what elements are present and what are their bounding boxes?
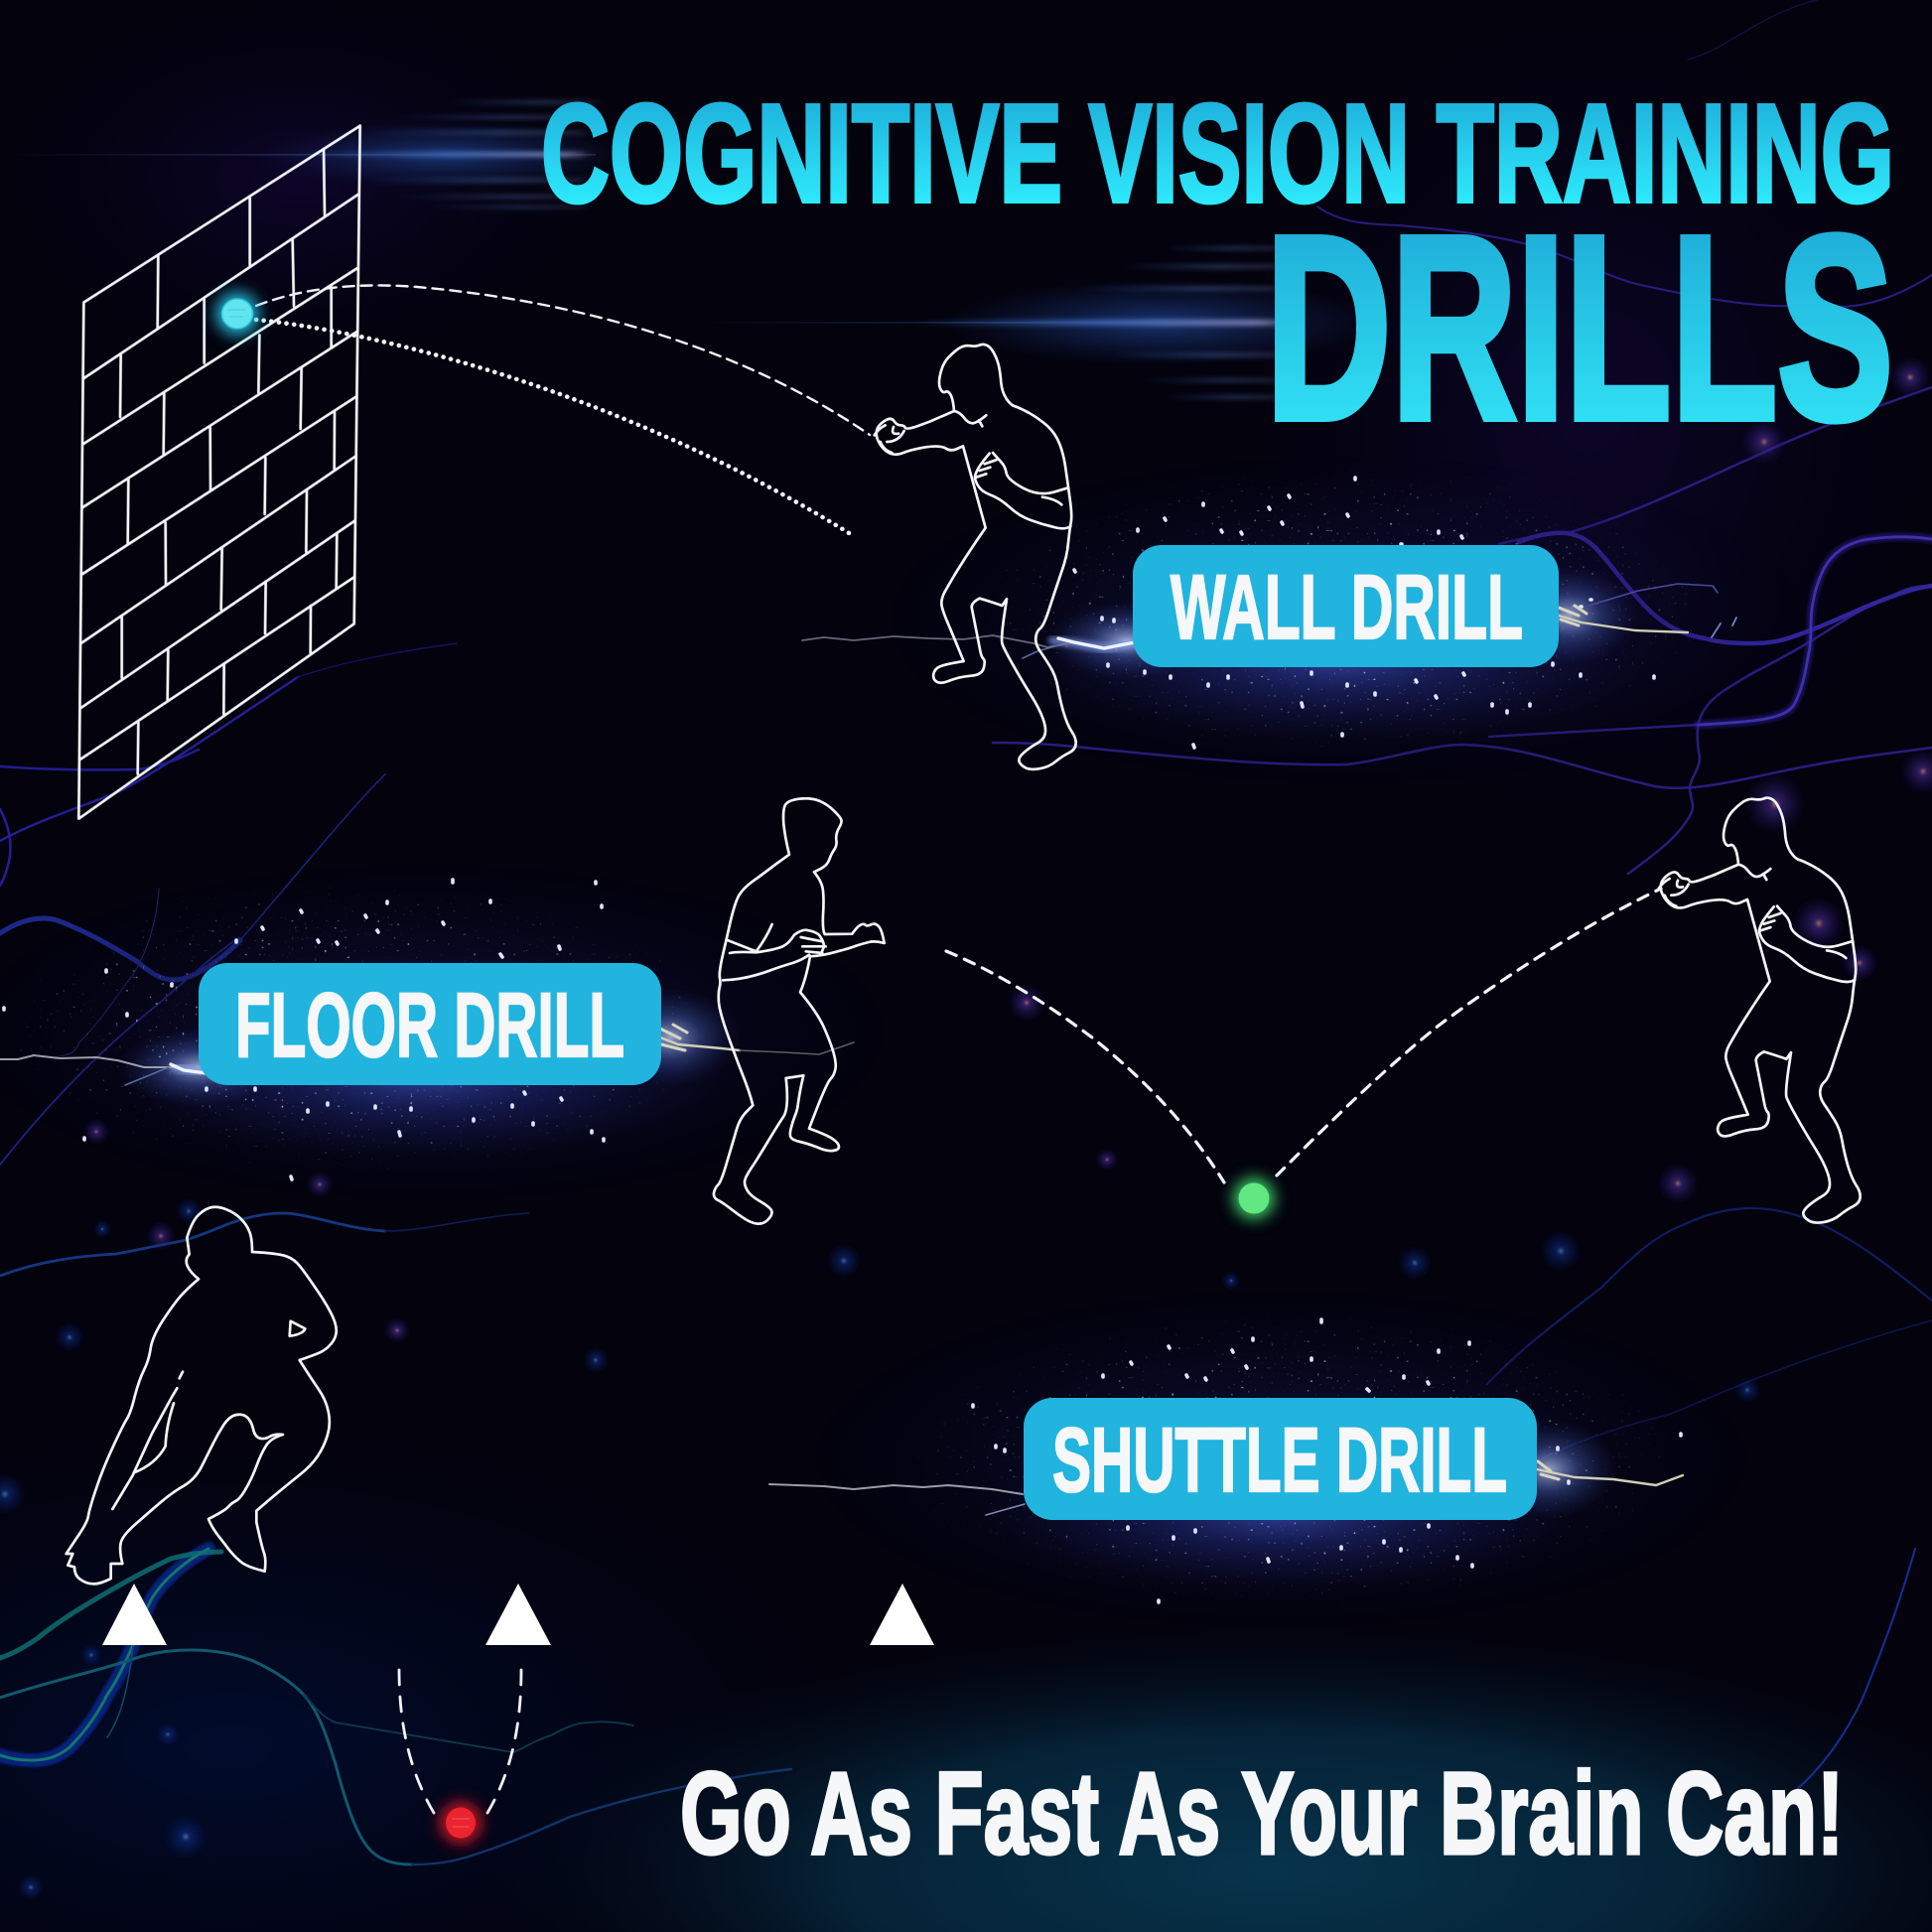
label: shuttle drill [1024, 1398, 1537, 1520]
trajectory: shuttle curve [399, 1670, 521, 1813]
figure: wall drill thrower [875, 345, 1076, 769]
label: floor drill [199, 963, 661, 1085]
nebula: shuttle drill [814, 1291, 1747, 1628]
figure: catcher, centre [714, 798, 885, 1224]
title [541, 74, 1894, 474]
figure: floor drill thrower, right [1659, 798, 1861, 1223]
label: shuttle drill: SHUTTLE DRILL [1052, 1410, 1507, 1511]
trajectory: floor bounce [946, 889, 1661, 1182]
red ball [441, 1803, 481, 1843]
speed streaks behind title [0, 100, 1380, 399]
figure: shuttle runner [67, 1207, 337, 1584]
label: wall drill [1133, 545, 1559, 667]
brick wall [78, 126, 360, 819]
blue ball [216, 293, 258, 335]
green ball [1234, 1178, 1274, 1218]
label: wall drill: WALL DRILL [1171, 557, 1523, 658]
label: floor drill: FLOOR DRILL [235, 975, 624, 1076]
cone markers [102, 1584, 934, 1645]
trajectory: wall bounce arcs [256, 285, 870, 536]
nebula: floor drill [0, 864, 884, 1201]
lightning streaks [0, 584, 1736, 1515]
nebula: wall drill [889, 457, 1802, 784]
